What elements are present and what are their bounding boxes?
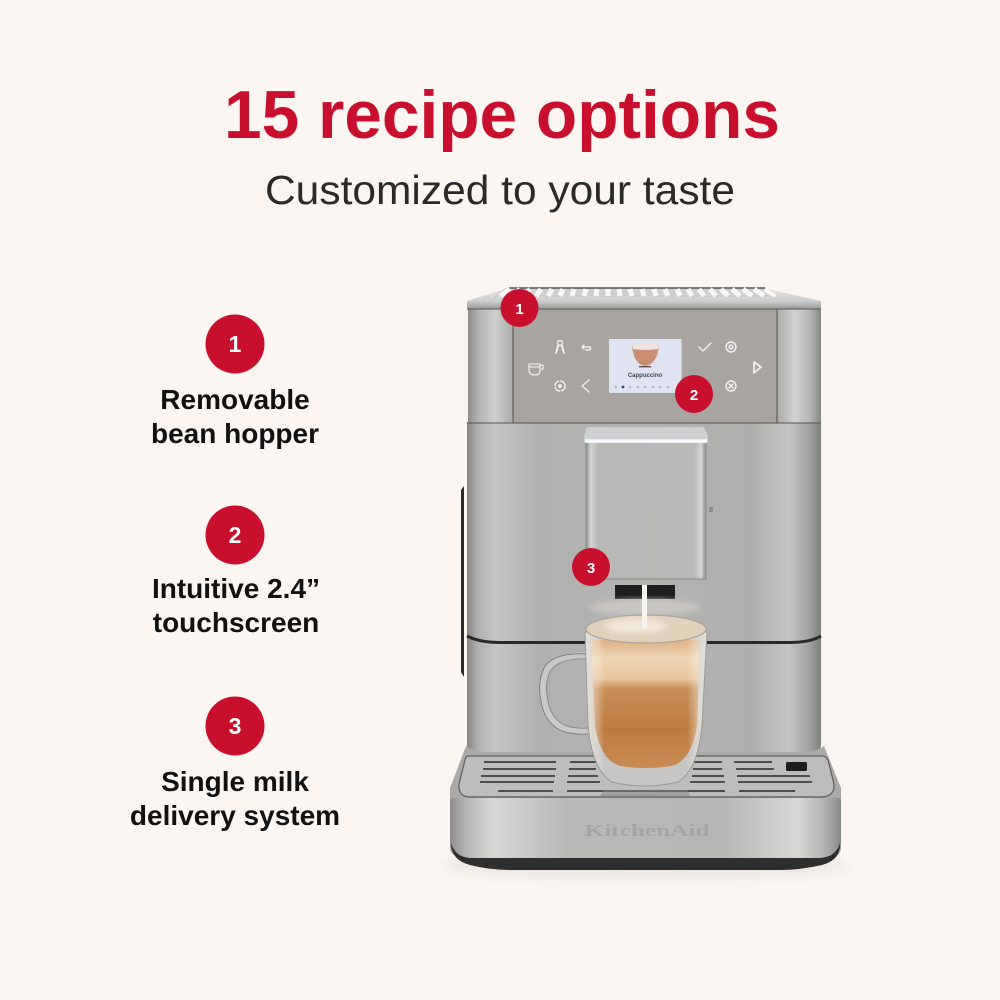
feature 1: removable bean hopper: 1 <box>229 331 242 357</box>
touchscreen <box>609 339 682 393</box>
glass mug <box>540 585 707 796</box>
drip tray <box>450 746 841 857</box>
brand mark: KitchenAid <box>584 821 710 840</box>
seam <box>467 636 821 642</box>
middle body <box>467 422 821 644</box>
feature 3 label: Single milk <box>161 766 309 797</box>
icon: settings <box>726 342 736 352</box>
upper left side <box>468 309 513 423</box>
bean hopper top grid <box>490 288 790 298</box>
base <box>451 843 840 870</box>
milk stream <box>642 585 647 629</box>
feature 1: removable bean hopper <box>151 314 319 449</box>
screen label: Cappuccino <box>628 373 662 379</box>
marker 2 <box>675 375 713 413</box>
icon: left chevron <box>582 380 589 392</box>
feature 1 label: bean hopper <box>151 418 319 449</box>
dispenser head cap <box>584 427 708 443</box>
icon: cup <box>529 364 543 375</box>
icon: play <box>754 362 761 373</box>
subtitle: Customized to your taste <box>265 167 735 213</box>
panel icons <box>529 340 761 392</box>
title: 15 recipe options <box>224 77 780 153</box>
icon: bean mode <box>555 381 565 391</box>
marker 2: 2 <box>690 387 698 404</box>
feature 2: touchscreen: 2 <box>229 522 241 548</box>
feature 3 label: delivery system <box>130 800 340 831</box>
marker 3 <box>572 548 610 586</box>
feature 2 label: touchscreen <box>153 607 319 638</box>
mug handle <box>543 656 588 731</box>
spout <box>615 585 675 599</box>
icon: cancel <box>726 381 736 391</box>
mug glass <box>585 632 707 786</box>
floor shadow <box>441 854 851 878</box>
upper right side <box>777 309 821 423</box>
foam <box>586 615 706 643</box>
marker 3: 3 <box>587 560 595 577</box>
feature 3: milk delivery <box>130 696 340 831</box>
small sensor <box>709 507 713 512</box>
marker 1 <box>500 289 538 327</box>
tray grate <box>459 756 834 797</box>
glass highlight <box>585 632 707 786</box>
control panel <box>513 309 777 423</box>
grate slots <box>480 762 812 791</box>
screen pager dots <box>615 386 669 388</box>
icon: person <box>556 346 564 353</box>
badge 2 <box>206 506 264 564</box>
coffee machine <box>441 288 851 878</box>
mug reflection <box>600 790 690 796</box>
lid <box>467 289 821 309</box>
dispenser body <box>586 443 706 579</box>
tray front <box>450 798 841 858</box>
badge 3 <box>206 696 264 756</box>
feature 3: milk delivery: 3 <box>229 713 241 739</box>
feature 2: touchscreen <box>152 506 320 638</box>
coffee <box>591 640 700 768</box>
reflection under spout <box>590 599 700 615</box>
icon: check <box>699 343 711 351</box>
feature 2 label: Intuitive 2.4” <box>152 573 320 604</box>
screen cup <box>632 342 659 366</box>
panel outline <box>467 309 821 423</box>
feature 1 label: Removable <box>160 384 310 415</box>
tray button <box>786 762 807 771</box>
water tank edge <box>461 486 464 677</box>
badge 1 <box>206 314 264 374</box>
icon: back <box>582 345 590 350</box>
lower body <box>467 640 821 752</box>
marker 1: 1 <box>515 301 524 318</box>
